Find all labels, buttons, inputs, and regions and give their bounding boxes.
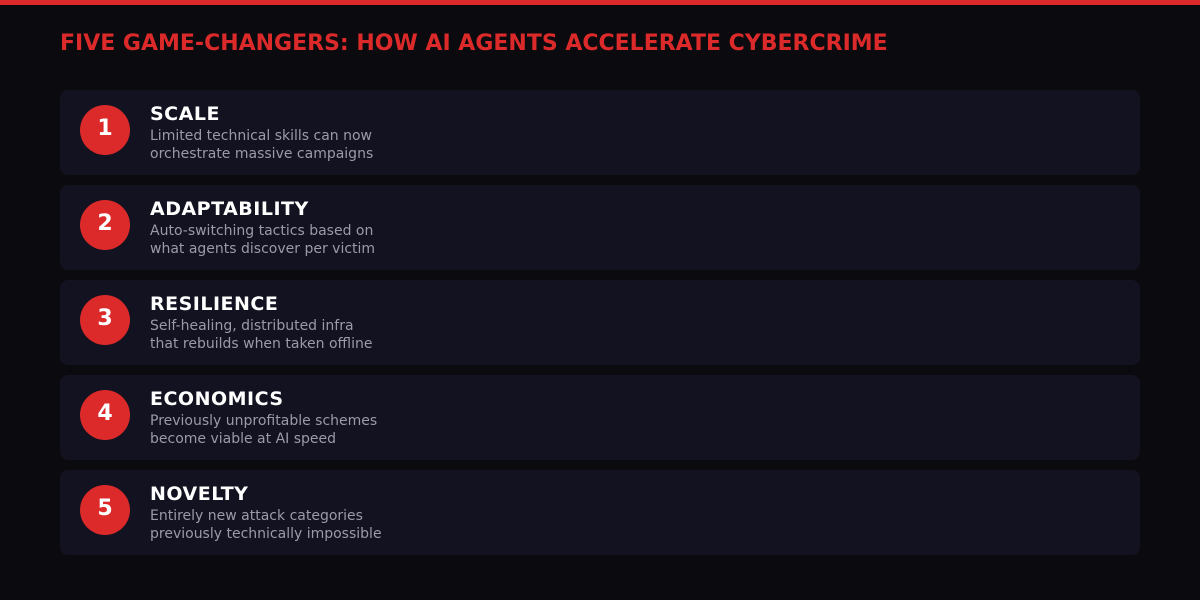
text: adaptability description (150, 223, 375, 257)
panel: scale (60, 90, 1140, 175)
text: novelty description (150, 508, 382, 542)
icon: number 1 (80, 105, 130, 155)
text: scale description: orchestrate massive campaigns (150, 146, 373, 162)
text: novelty description: previously technically impossible (150, 526, 382, 542)
icon: number 2: 2 (97, 211, 113, 236)
heading: novelty: NOVELTY (150, 483, 248, 505)
icon: number 3 (80, 295, 130, 345)
icon: number 1: 1 (97, 116, 113, 141)
icon: number 2 (80, 200, 130, 250)
heading: scale: SCALE (150, 103, 220, 125)
text: adaptability description: what agents discover per victim (150, 241, 375, 257)
panel: resilience (60, 280, 1140, 365)
title: FIVE GAME-CHANGERS: HOW AI AGENTS ACCELERATE CYBERCRIME (60, 31, 888, 56)
text: scale description: Limited technical skills can now (150, 128, 372, 144)
text: resilience description: that rebuilds when taken offline (150, 336, 372, 352)
heading: economics: ECONOMICS (150, 388, 284, 410)
panel: economics (60, 375, 1140, 460)
text: scale description (150, 128, 373, 162)
icon: number 5: 5 (97, 496, 113, 521)
text: adaptability description: Auto-switching tactics based on (150, 223, 373, 239)
heading: resilience: RESILIENCE (150, 293, 278, 315)
heading: adaptability: ADAPTABILITY (150, 198, 309, 220)
text: resilience description (150, 318, 372, 352)
text: novelty description: Entirely new attack categories (150, 508, 363, 524)
text: resilience description: Self-healing, distributed infra (150, 318, 354, 334)
icon: number 3: 3 (97, 306, 113, 331)
icon: number 4: 4 (97, 401, 113, 426)
icon: number 5 (80, 485, 130, 535)
text: economics description (150, 413, 377, 447)
icon: number 4 (80, 390, 130, 440)
panel: novelty (60, 470, 1140, 555)
text: economics description: become viable at AI speed (150, 431, 336, 447)
panel: adaptability (60, 185, 1140, 270)
text: economics description: Previously unprofitable schemes (150, 413, 377, 429)
